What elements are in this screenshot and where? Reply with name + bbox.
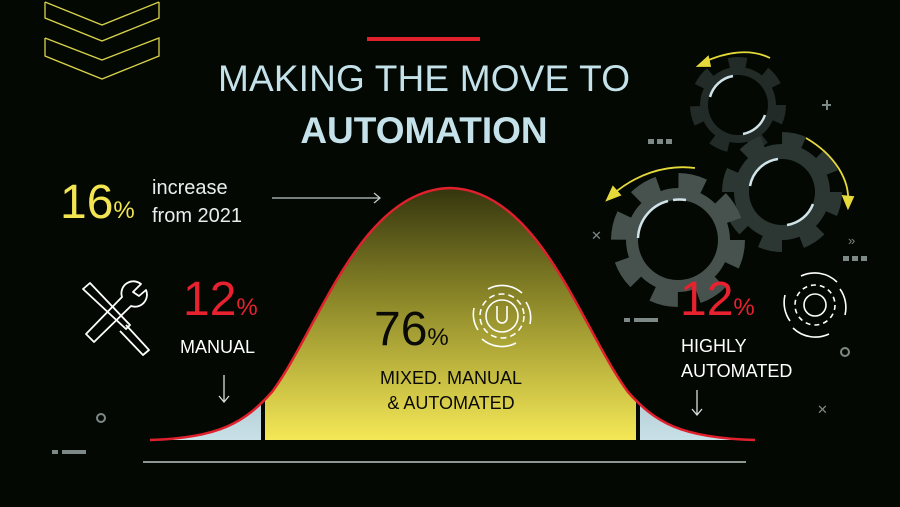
stat: 12% highly automated: HIGHLY <box>681 336 747 356</box>
stat: 76% mixed: & AUTOMATED <box>387 393 515 413</box>
stat: 12% highly automated: 12% <box>680 273 755 326</box>
title: MAKING THE MOVE TO <box>218 58 630 99</box>
title: AUTOMATION <box>300 110 548 151</box>
curved arrows <box>607 52 853 208</box>
stat: 16% increase: 16% <box>60 176 135 229</box>
stat: 16% increase <box>60 176 242 229</box>
stat: 76% mixed: MIXED. MANUAL <box>380 368 522 388</box>
baseline <box>143 461 746 463</box>
red accent line <box>367 37 480 41</box>
decorative bits <box>52 100 867 454</box>
gears <box>621 64 833 297</box>
decorative chevrons <box>45 2 159 79</box>
stat: 16% increase: from 2021 <box>152 205 242 227</box>
stat: 12% highly automated <box>680 273 792 415</box>
stat: 76% mixed <box>374 303 522 413</box>
decorative bits: ✕ <box>817 402 828 417</box>
icon: tools <box>83 281 149 355</box>
stat: 12% highly automated: AUTOMATED <box>681 361 792 381</box>
decorative bits: ✕ <box>591 228 602 243</box>
stat: 12% manual <box>180 273 258 402</box>
stat: 76% mixed: 76% <box>374 303 449 356</box>
decorative bits: » <box>848 233 855 248</box>
stat: 16% increase: increase <box>152 177 228 199</box>
arrow: to curve <box>272 193 380 203</box>
stat: 12% manual: 12% <box>183 273 258 326</box>
title <box>218 58 630 151</box>
stat: 12% manual: MANUAL <box>180 337 255 357</box>
icon: rotating gear <box>784 273 846 337</box>
bell curve chart <box>150 180 758 442</box>
icon: gear with wrench <box>473 285 531 347</box>
